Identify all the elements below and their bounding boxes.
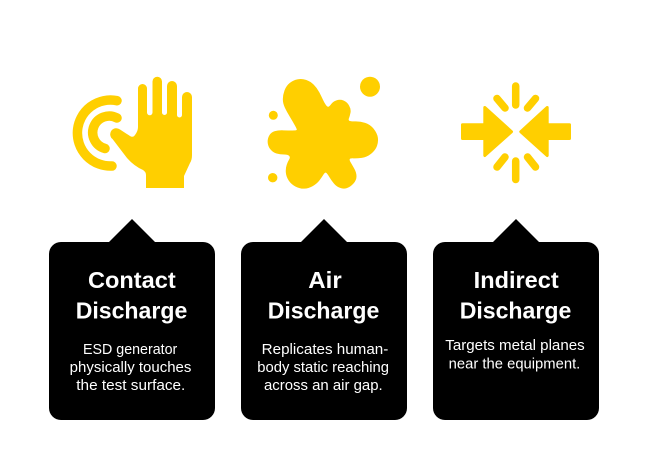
heading: indirect discharge: Indirect: [474, 267, 559, 293]
icon: hand touching with ripple arcs: [77, 77, 192, 188]
icon: splat with droplets: [268, 77, 380, 188]
text: indirect discharge description: near the equipment.: [449, 356, 580, 372]
icon: converging arrows with sparks: [462, 86, 570, 180]
text: contact discharge description: [70, 342, 191, 394]
heading: air discharge: [268, 267, 379, 324]
heading: indirect discharge: [460, 267, 571, 324]
text: contact discharge description: physically touches: [70, 360, 191, 376]
text: indirect discharge description: Targets metal planes: [445, 338, 585, 354]
heading: contact discharge: Contact: [88, 267, 176, 293]
heading: indirect discharge: Discharge: [460, 298, 571, 324]
text: air discharge description: across an air gap.: [264, 378, 383, 394]
panel: indirect discharge: [433, 219, 599, 420]
panel: air discharge: [241, 219, 407, 420]
heading: contact discharge: Discharge: [76, 298, 187, 324]
text: air discharge description: [257, 342, 389, 394]
text: contact discharge description: ESD generator: [83, 342, 177, 358]
text: air discharge description: body static reaching: [257, 360, 389, 376]
panel: contact discharge: [49, 219, 215, 420]
text: indirect discharge description: [445, 338, 585, 372]
text: contact discharge description: the test surface.: [76, 378, 185, 394]
heading: air discharge: Air: [308, 267, 342, 293]
text: air discharge description: Replicates human-: [262, 342, 388, 358]
heading: air discharge: Discharge: [268, 298, 379, 324]
heading: contact discharge: [76, 267, 187, 324]
